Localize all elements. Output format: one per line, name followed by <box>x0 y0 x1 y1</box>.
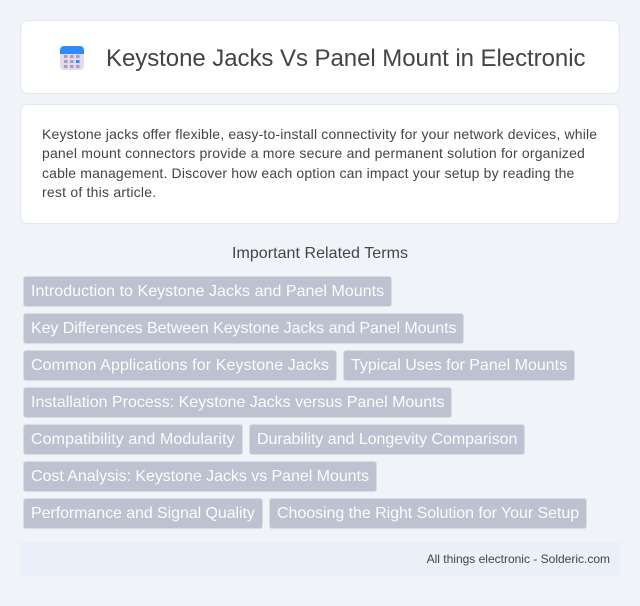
footer <box>20 542 620 576</box>
tag: typical uses: Typical Uses for Panel Mounts <box>351 357 567 374</box>
text block: introduction: cable management. Discover how each option can impact your setup by reading the <box>42 165 574 181</box>
tag: performance: Performance and Signal Quality <box>31 505 255 522</box>
tag: common applications <box>23 350 337 381</box>
text block: introduction: rest of this article. <box>42 184 156 200</box>
title: Keystone Jacks Vs Panel Mount in Electronic <box>106 45 585 72</box>
heading: important related terms: Important Related Terms <box>232 245 408 262</box>
tag: installation process: Installation Process: Keystone Jacks versus Panel Mounts <box>31 394 445 411</box>
text block: introduction: Keystone jacks offer flexible, easy-to-install connectivity for your network devices, while <box>42 126 597 142</box>
tag: introduction: Introduction to Keystone Jacks and Panel Mounts <box>31 283 384 300</box>
text block: introduction <box>42 126 597 200</box>
tag: typical uses <box>343 350 575 381</box>
tag: common applications: Common Applications for Keystone Jacks <box>31 357 329 374</box>
tag: compatibility <box>23 424 243 455</box>
tag: compatibility: Compatibility and Modularity <box>31 431 235 448</box>
panel: introduction <box>20 104 620 224</box>
footer credit: All things electronic - Solderic.com <box>427 552 610 566</box>
tag: durability <box>249 424 525 455</box>
tag: choosing <box>269 498 587 529</box>
tag: key differences <box>23 313 464 344</box>
tag: durability: Durability and Longevity Comparison <box>257 431 517 448</box>
panel: title card <box>20 20 620 94</box>
tag: cost analysis: Cost Analysis: Keystone Jacks vs Panel Mounts <box>31 468 369 485</box>
icon: calendar <box>60 46 84 70</box>
panel: related term tags <box>23 276 587 529</box>
tag: key differences: Key Differences Between Keystone Jacks and Panel Mounts <box>31 320 456 337</box>
text block: introduction: panel mount connectors provide a more secure and permanent solution for organized <box>42 145 585 161</box>
tag: installation process <box>23 387 452 418</box>
tag: introduction <box>23 276 392 307</box>
tag: performance <box>23 498 263 529</box>
tag: choosing: Choosing the Right Solution for Your Setup <box>277 505 579 522</box>
tag: cost analysis <box>23 461 377 492</box>
